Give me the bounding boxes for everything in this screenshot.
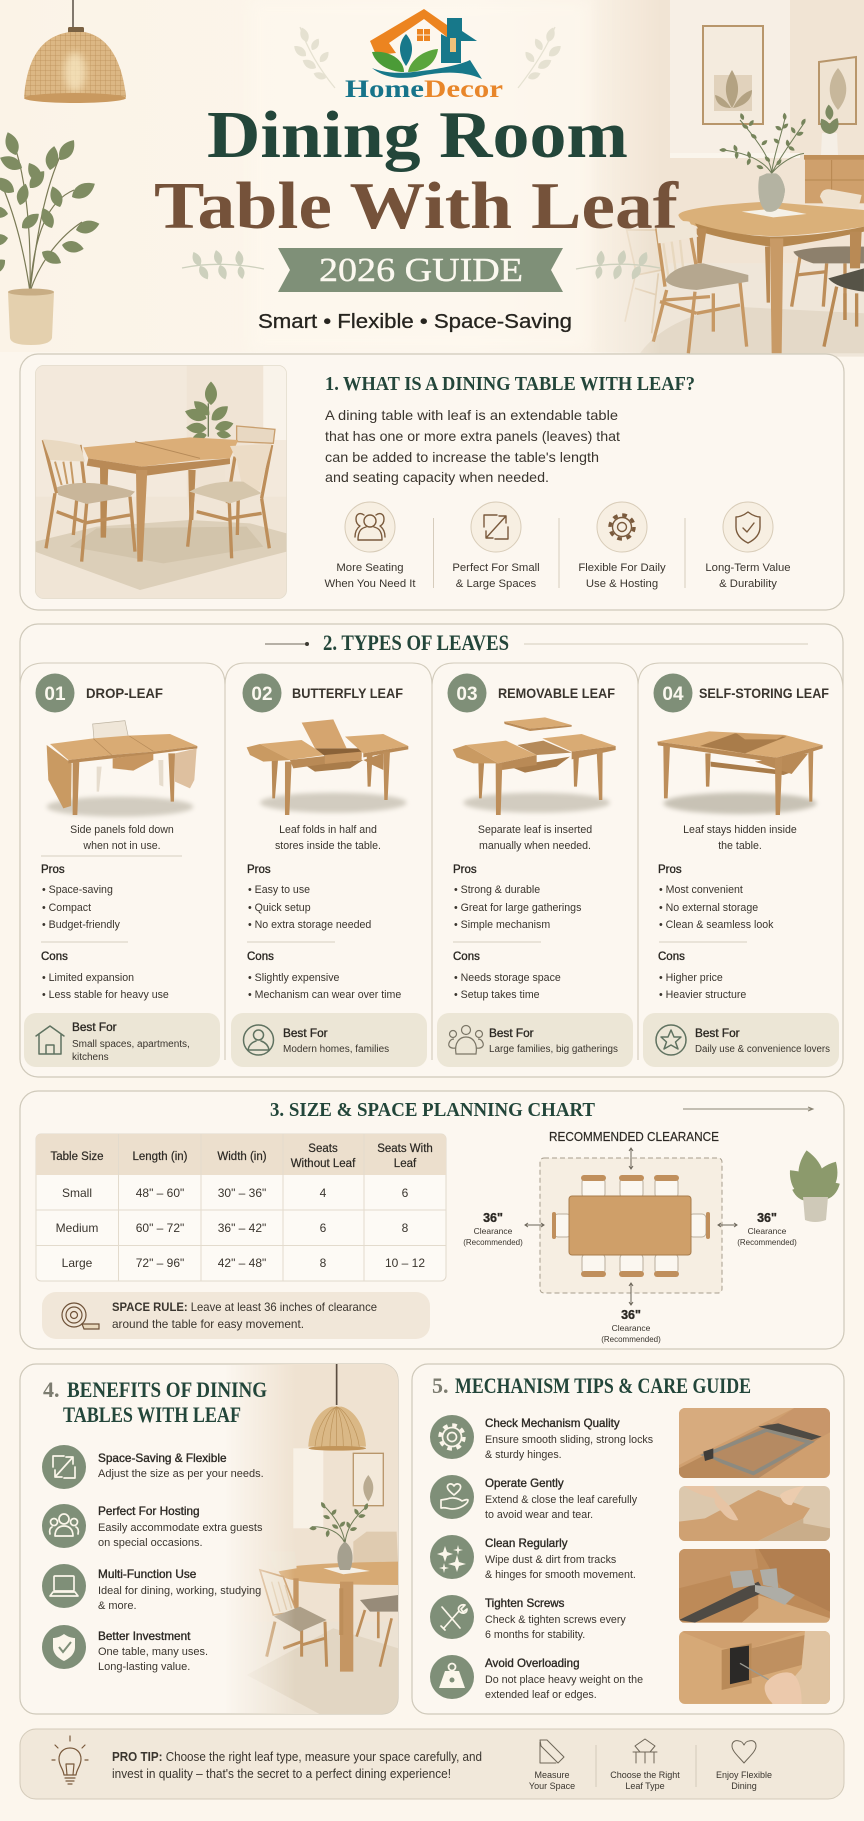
size table: Medium: [56, 1221, 98, 1235]
best for: Best For: [283, 1026, 328, 1040]
pendant lamp: [24, 0, 126, 103]
feature: flexible: [578, 502, 666, 590]
best for: kitchens: [72, 1052, 109, 1063]
card 3: removable leaf: • Strong & durable: [454, 884, 540, 896]
description: that has one or more extra panels (leaves) that: [325, 428, 620, 444]
clearance diagram: [463, 1130, 797, 1344]
card 2: butterfly leaf: • No extra storage needed: [248, 919, 371, 931]
size table: 6: [320, 1221, 327, 1235]
table illustration: [657, 731, 823, 815]
feature: value: Long-Term Value: [705, 562, 791, 574]
step: choose leaf type: [610, 1739, 680, 1791]
card 1: drop-leaf: • Space-saving: [42, 884, 113, 896]
heading: MECHANISM TIPS & CARE GUIDE: [455, 1373, 751, 1398]
title: [154, 98, 679, 243]
best for: [24, 1013, 220, 1067]
card 2: butterfly leaf: Leaf folds in half and: [279, 824, 377, 836]
tip: mechanism quality: & sturdy hinges.: [485, 1449, 562, 1461]
card 2: butterfly leaf: • Slightly expensive: [248, 972, 340, 984]
size table: 8: [402, 1221, 409, 1235]
photo: mechanism frame: [679, 1408, 830, 1478]
benefit: space-saving: Space-Saving & Flexible: [98, 1451, 227, 1465]
step: measure: Your Space: [529, 1781, 575, 1791]
heading: 1. WHAT IS A DINING TABLE WITH LEAF?: [325, 373, 695, 395]
card 3: removable leaf: • Great for large gatherings: [454, 902, 581, 914]
card 1: drop-leaf: • Less stable for heavy use: [42, 989, 169, 1001]
card 1: drop-leaf: when not in use.: [82, 840, 161, 852]
benefit: hosting: [42, 1504, 263, 1549]
size table: Leaf: [394, 1158, 417, 1170]
size table: [36, 1134, 446, 1281]
size table: 48" – 60": [136, 1186, 184, 1200]
best for: Daily use & convenience lovers: [695, 1044, 830, 1055]
heading: 2. TYPES OF LEAVES: [323, 630, 509, 655]
feature: small and large spaces: [452, 502, 540, 590]
card 3: removable leaf: Pros: [453, 864, 477, 876]
title: Dining Room: [207, 98, 628, 172]
tip: avoid overloading: [430, 1655, 643, 1701]
size table: Small: [62, 1186, 92, 1200]
card 2: butterfly leaf: stores inside the table.: [275, 840, 381, 852]
right chair: [188, 445, 272, 558]
table: [100, 465, 196, 538]
clearance diagram: 36": [483, 1211, 503, 1225]
benefit: multi-function: Ideal for dining, working, studying: [98, 1585, 261, 1597]
photo: hands on leaf: [678, 1486, 830, 1541]
tip: tighten screws: 6 months for stability.: [485, 1629, 585, 1641]
card 3: removable leaf: • Setup takes time: [454, 989, 540, 1001]
card 4: self-storing leaf: Pros: [658, 864, 682, 876]
size table: Without Leaf: [291, 1158, 356, 1170]
size table: Seats: [308, 1143, 338, 1155]
card 1: drop-leaf: • Compact: [42, 902, 91, 914]
size table: Table Size: [50, 1151, 104, 1163]
dining room image: [244, 1364, 398, 1714]
best for: Modern homes, families: [283, 1044, 389, 1055]
feature: flexible: Flexible For Daily: [578, 562, 666, 574]
card 4: self-storing leaf: • Most convenient: [659, 884, 743, 896]
tip: tighten screws: Tighten Screws: [485, 1597, 565, 1610]
size table: 30" – 36": [218, 1186, 266, 1200]
size table: 10 – 12: [385, 1256, 425, 1270]
tip: mechanism quality: Ensure smooth sliding, strong locks: [485, 1434, 653, 1446]
best for: [437, 1013, 633, 1067]
tip: clean regularly: Wipe dust & dirt from tracks: [485, 1554, 616, 1566]
heading: [43, 1377, 267, 1427]
card 1: drop-leaf: Cons: [41, 951, 68, 963]
best for: Large families, big gatherings: [489, 1044, 618, 1055]
card 1: drop-leaf: [24, 674, 220, 1067]
banner: 2026 guide: 2026 GUIDE: [319, 252, 523, 289]
step: measure: [529, 1740, 575, 1791]
heading: [265, 630, 808, 655]
pro tip bar: invest in quality – that's the secret to a perfect dining experience!: [112, 1767, 451, 1781]
card 2: butterfly leaf: [231, 674, 427, 1067]
panel 4: benefits: [20, 1364, 400, 1715]
tip: avoid overloading: extended leaf or edges.: [485, 1689, 597, 1701]
clearance diagram: 36": [621, 1308, 641, 1322]
step: enjoy dining: [716, 1741, 772, 1791]
clearance diagram: Clearance: [612, 1323, 651, 1333]
size table: 60" – 72": [136, 1221, 184, 1235]
tagline: Smart • Flexible • Space-Saving: [258, 311, 572, 333]
card 4: self-storing leaf: • Higher price: [659, 972, 723, 984]
tip: tighten screws: [430, 1595, 626, 1641]
feature: more seating: [324, 502, 416, 590]
logo: Home Decor: [345, 76, 503, 103]
card 2: butterfly leaf: Cons: [247, 951, 274, 963]
step: measure: Measure: [534, 1770, 570, 1780]
card 1: drop-leaf: • Budget-friendly: [42, 919, 121, 931]
tip: avoid overloading: Do not place heavy weight on the: [485, 1674, 643, 1686]
tip: clean regularly: [430, 1535, 636, 1581]
tip: clean regularly: Clean Regularly: [485, 1537, 568, 1550]
step: choose leaf type: Leaf Type: [625, 1781, 665, 1791]
description: A dining table with leaf is an extendable table: [325, 407, 618, 423]
photo: tightening screws: [679, 1631, 830, 1704]
feature: value: [705, 502, 791, 590]
table illustration: [453, 717, 616, 815]
feature: value: & Durability: [719, 578, 777, 590]
card 1: drop-leaf: 01: [44, 684, 66, 705]
space rule callout: around the table for easy movement.: [112, 1317, 304, 1331]
clearance diagram: (Recommended): [601, 1335, 661, 1344]
best for: Best For: [72, 1020, 117, 1034]
space rule callout: SPACE RULE: Leave at least 36 inches of clearance: [112, 1300, 377, 1314]
front chair: [653, 228, 747, 353]
rear faint chair: [625, 230, 662, 333]
benefit: investment: Long-lasting value.: [98, 1661, 190, 1673]
icon: light bulb: [52, 1736, 88, 1784]
feature: flexible: Use & Hosting: [586, 578, 658, 590]
card 3: removable leaf: • Needs storage space: [454, 972, 561, 984]
benefit: hosting: Easily accommodate extra guests: [98, 1522, 263, 1534]
feature: more seating: When You Need It: [324, 578, 416, 590]
size table: Seats With: [377, 1143, 433, 1155]
header background: [0, 0, 864, 352]
clearance diagram: RECOMMENDED CLEARANCE: [549, 1130, 719, 1144]
decorative sprig right: [576, 249, 660, 281]
left chair: [43, 440, 135, 562]
back chair: [237, 426, 275, 443]
card 2: butterfly leaf: • Mechanism can wear over time: [248, 989, 401, 1001]
feature: small and large spaces: Perfect For Small: [452, 562, 540, 574]
step: enjoy dining: Dining: [731, 1781, 757, 1791]
benefit: multi-function: [42, 1564, 261, 1612]
description: [325, 407, 620, 485]
tip: mechanism quality: Check Mechanism Quality: [485, 1417, 620, 1430]
card 3: removable leaf: 03: [456, 684, 478, 705]
benefit: hosting: Perfect For Hosting: [98, 1504, 200, 1518]
logo: [345, 9, 503, 103]
photo: dining table: [35, 365, 287, 599]
best for: Best For: [695, 1026, 740, 1040]
benefit: investment: [42, 1625, 208, 1673]
feature: small and large spaces: & Large Spaces: [456, 578, 537, 590]
step: enjoy dining: Enjoy Flexible: [716, 1770, 772, 1780]
heading: 3. SIZE & SPACE PLANNING CHART: [270, 1099, 596, 1121]
size table: 42" – 48": [218, 1256, 266, 1270]
header room scene: [618, 0, 864, 356]
card 3: removable leaf: manually when needed.: [479, 840, 591, 852]
size table: Width (in): [217, 1151, 267, 1163]
card 4: self-storing leaf: SELF-STORING LEAF: [699, 685, 829, 701]
size table: 4: [320, 1186, 327, 1200]
banner: 2026 guide: [278, 248, 563, 292]
tip: operate gently: Operate Gently: [485, 1477, 564, 1490]
laurel sprigs near logo: [292, 26, 563, 88]
card 3: removable leaf: REMOVABLE LEAF: [498, 685, 615, 701]
best for: Best For: [489, 1026, 534, 1040]
card 2: butterfly leaf: Pros: [247, 864, 271, 876]
decorative sprig left: [182, 249, 264, 281]
tip: tighten screws: Check & tighten screws every: [485, 1614, 626, 1626]
benefit: space-saving: Adjust the size as per your needs.: [98, 1468, 264, 1480]
card 4: self-storing leaf: • No external storage: [659, 902, 758, 914]
tip: clean regularly: & hinges for smooth movement.: [485, 1569, 636, 1581]
card 3: removable leaf: • Simple mechanism: [454, 919, 550, 931]
card 4: self-storing leaf: [643, 674, 839, 1067]
description: can be added to increase the table's length: [325, 449, 599, 465]
panel 5: mechanism tips: [412, 1364, 844, 1714]
tip: operate gently: to avoid wear and tear.: [485, 1509, 593, 1521]
size table: Length (in): [133, 1151, 188, 1163]
potted plant: [783, 1148, 845, 1222]
panel 3: size and space planning chart: [20, 1091, 845, 1349]
size table: 72" – 96": [136, 1256, 184, 1270]
heading: TABLES WITH LEAF: [63, 1402, 241, 1427]
clearance diagram: Clearance: [748, 1226, 787, 1236]
heading: BENEFITS OF DINING: [67, 1377, 267, 1402]
card 2: butterfly leaf: • Easy to use: [248, 884, 310, 896]
card 4: self-storing leaf: Cons: [658, 951, 685, 963]
card 2: butterfly leaf: 02: [251, 684, 273, 705]
card 4: self-storing leaf: • Heavier structure: [659, 989, 746, 1001]
clearance diagram: (Recommended): [737, 1238, 797, 1247]
tip: mechanism quality: [430, 1415, 653, 1461]
panel 1: what is a dining table with leaf: [20, 354, 844, 610]
card 2: butterfly leaf: BUTTERFLY LEAF: [292, 685, 403, 701]
benefit: multi-function: Multi-Function Use: [98, 1567, 197, 1581]
card 1: drop-leaf: • Limited expansion: [42, 972, 134, 984]
card 4: self-storing leaf: Leaf stays hidden inside: [683, 824, 797, 836]
clearance diagram: (Recommended): [463, 1238, 523, 1247]
near right chair: [824, 287, 857, 347]
card 4: self-storing leaf: 04: [662, 684, 684, 705]
best for: [643, 1013, 839, 1067]
pro tip bar: [20, 1729, 844, 1799]
benefit: space-saving: [42, 1445, 264, 1489]
tip text: PRO TIP: Choose the right leaf type, measure your space carefully, and: [112, 1750, 482, 1764]
table illustration: [47, 721, 197, 817]
title: Table With Leaf: [154, 169, 679, 243]
clearance diagram: 36": [757, 1211, 777, 1225]
potted plant left: [0, 130, 101, 345]
card 1: drop-leaf: Side panels fold down: [70, 824, 174, 836]
table illustration: [247, 719, 408, 815]
card 4: self-storing leaf: the table.: [718, 840, 762, 852]
description: and seating capacity when needed.: [325, 469, 549, 485]
benefit: investment: One table, many uses.: [98, 1646, 208, 1658]
best for: Small spaces, apartments,: [72, 1039, 190, 1050]
arrow: [683, 1107, 813, 1111]
tip: operate gently: Extend & close the leaf carefully: [485, 1494, 638, 1506]
benefit: investment: Better Investment: [98, 1629, 191, 1643]
size table: 36" – 42": [218, 1221, 266, 1235]
card 3: removable leaf: Separate leaf is inserted: [478, 824, 592, 836]
card 2: butterfly leaf: • Quick setup: [248, 902, 311, 914]
card 3: removable leaf: Cons: [453, 951, 480, 963]
benefit: hosting: on special occasions.: [98, 1537, 203, 1549]
benefit: multi-function: & more.: [98, 1600, 137, 1612]
clearance diagram: Clearance: [474, 1226, 513, 1236]
card 3: removable leaf: [437, 674, 633, 1067]
photo: hinge: [679, 1549, 830, 1623]
step: choose leaf type: Choose the Right: [610, 1770, 680, 1780]
tip: operate gently: [430, 1475, 638, 1521]
feature: more seating: More Seating: [336, 562, 404, 574]
panel 2: types of leaves: [20, 624, 843, 1077]
size table: 6: [402, 1186, 409, 1200]
right chairs: [820, 189, 862, 204]
space rule callout: [42, 1292, 430, 1339]
heading: 4.: [43, 1377, 60, 1402]
card 1: drop-leaf: Pros: [41, 864, 65, 876]
card 1: drop-leaf: DROP-LEAF: [86, 685, 163, 701]
tip: avoid overloading: Avoid Overloading: [485, 1657, 580, 1670]
card 4: self-storing leaf: • Clean & seamless look: [659, 919, 774, 931]
best for: [231, 1013, 427, 1067]
heading: 5.: [432, 1373, 448, 1398]
size table: Large: [62, 1256, 93, 1270]
size table: 8: [320, 1256, 327, 1270]
